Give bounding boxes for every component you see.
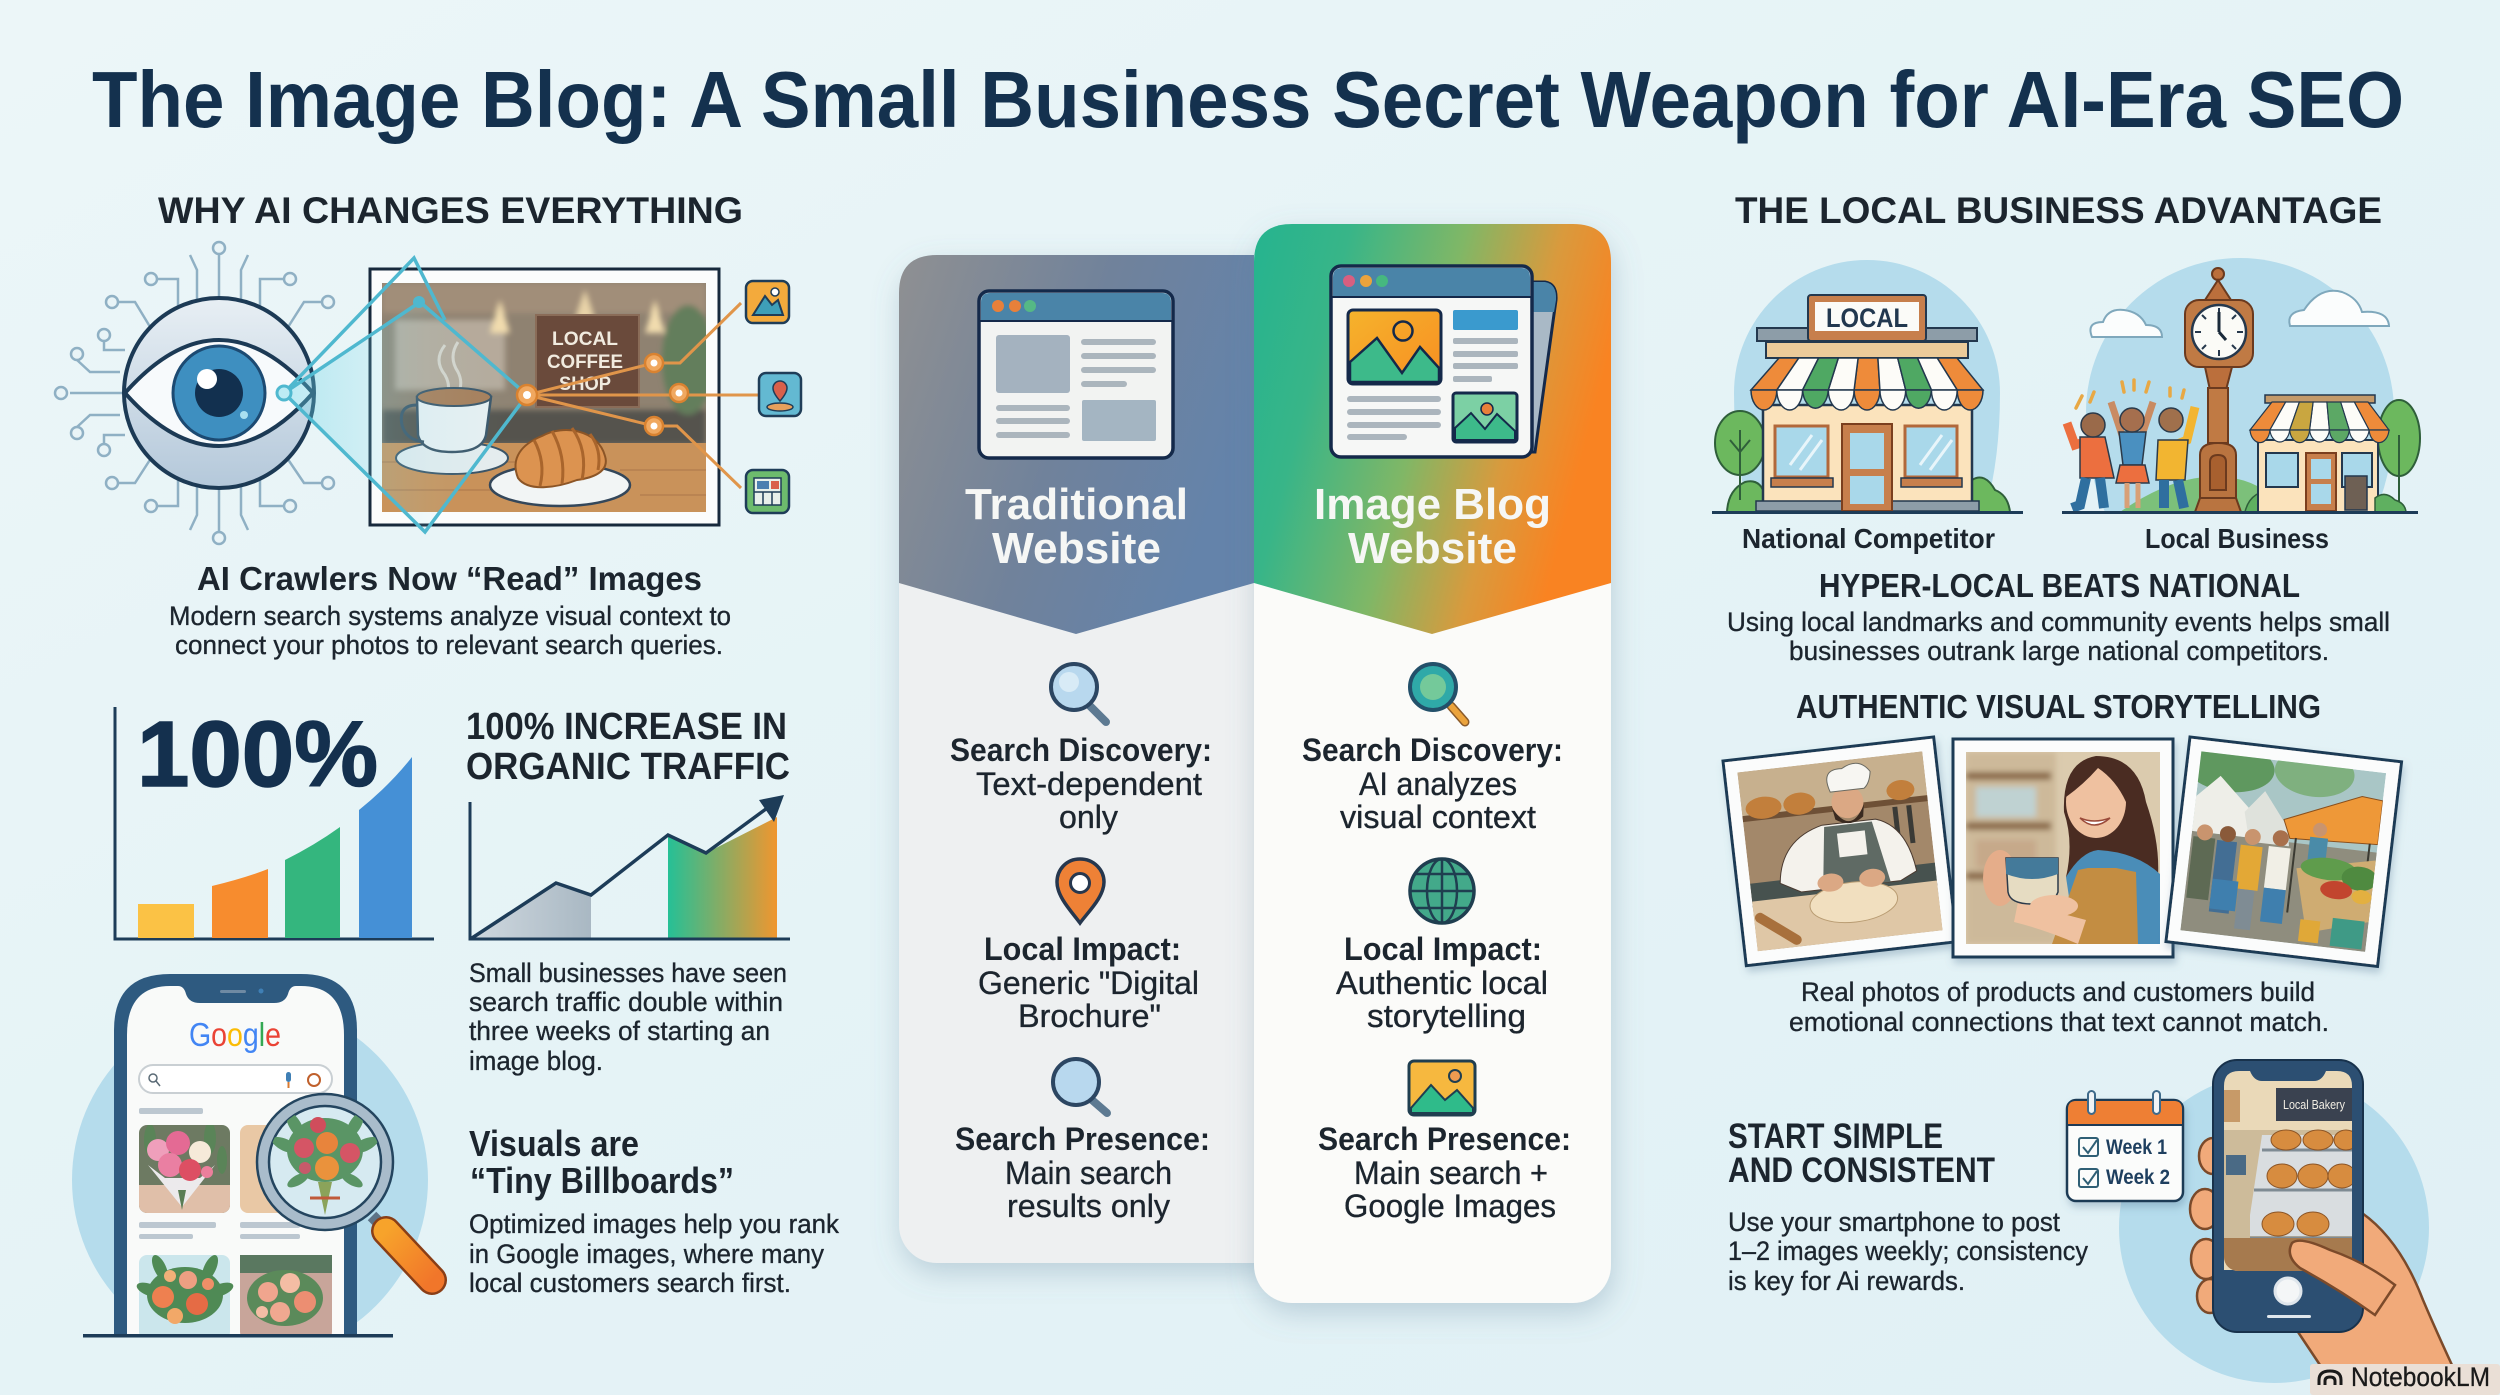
row: local impact traditional: Local Impact: bbox=[984, 931, 1181, 967]
icon: location pin bbox=[1057, 859, 1104, 923]
icon: weekly calendar checklist bbox=[2067, 1091, 2183, 1201]
awning bbox=[1751, 358, 1983, 410]
text: visuals are tiny billboards: local customers search first. bbox=[469, 1268, 791, 1298]
text: small businesses traffic double: Small businesses have seen bbox=[469, 958, 787, 988]
text: small businesses traffic double bbox=[469, 958, 787, 1076]
icon: location tag bbox=[759, 373, 801, 416]
area chart: organic traffic growth bbox=[470, 795, 790, 939]
search bar bbox=[139, 1065, 332, 1093]
row: search presence traditional bbox=[955, 1059, 1210, 1224]
cloud bbox=[2090, 310, 2162, 337]
heading: 100 percent increase in organic traffic: 100% INCREASE IN bbox=[466, 706, 787, 748]
icon: weekly calendar checklist: Week 1 bbox=[2106, 1136, 2167, 1159]
text: real photos build connections: emotional connections that text cannot match. bbox=[1789, 1007, 2329, 1037]
label: national competitor: National Competitor bbox=[1742, 523, 1995, 554]
text: start simple and consistent: Use your smartphone to post bbox=[1728, 1207, 2060, 1237]
result image: bouquet 3 bbox=[136, 1255, 234, 1334]
text: small businesses traffic double: three weeks of starting an bbox=[469, 1016, 770, 1046]
row: local impact image blog: Authentic local bbox=[1336, 965, 1548, 1001]
text: small businesses traffic double: search traffic double within bbox=[469, 987, 783, 1017]
result image: bouquet 2 partly hidden bbox=[240, 1125, 332, 1213]
text: AI crawlers now read images: connect your photos to relevant search queries. bbox=[175, 630, 723, 660]
row: local impact traditional bbox=[978, 859, 1199, 1034]
text: small businesses traffic double: image blog. bbox=[469, 1046, 603, 1076]
row: search presence traditional: Search Presence: bbox=[955, 1121, 1210, 1157]
photo: farmers market bbox=[2164, 734, 2402, 966]
row: local impact image blog: Local Impact: bbox=[1344, 931, 1542, 967]
row: search presence image blog: Search Presence: bbox=[1318, 1121, 1571, 1157]
community people cheering bbox=[2067, 402, 2195, 508]
result image: bouquet 1 bbox=[139, 1122, 230, 1213]
illustration: national competitor storefront bbox=[1712, 260, 2023, 514]
header: traditional website: Traditional bbox=[965, 480, 1188, 529]
image: local coffee shop photo: LOCAL bbox=[552, 329, 618, 350]
row: search presence traditional: results only bbox=[1007, 1188, 1170, 1224]
clock tower bbox=[2185, 268, 2253, 512]
panel: why AI changes everything bbox=[55, 190, 839, 1358]
phone: Local Bakery bbox=[2283, 1097, 2345, 1112]
header: image blog website bbox=[1254, 224, 1611, 634]
row: local impact traditional: Generic "Digital bbox=[978, 965, 1199, 1001]
heading: the local business advantage: THE LOCAL BUSINESS ADVANTAGE bbox=[1735, 190, 2382, 231]
illustration: national competitor storefront: LOCAL bbox=[1826, 303, 1908, 333]
icon: layout tag bbox=[746, 470, 789, 513]
text: start simple and consistent: 1–2 images weekly; consistency bbox=[1728, 1236, 2088, 1266]
row: search presence image blog: Google Images bbox=[1344, 1188, 1556, 1224]
icon: image bbox=[1409, 1061, 1475, 1115]
illustration: phone with Google image results bbox=[72, 974, 432, 1358]
icon: AI eye with circuit rays bbox=[55, 242, 334, 544]
heading: authentic visual storytelling: AUTHENTIC VISUAL STORYTELLING bbox=[1796, 688, 2321, 725]
icon: magnifier bbox=[1053, 1059, 1107, 1113]
icon: image tag bbox=[746, 281, 789, 323]
text: hyper-local beats national: HYPER-LOCAL BEATS NATIONAL bbox=[1819, 567, 2300, 604]
text: real photos build connections bbox=[1789, 977, 2329, 1037]
image: local coffee shop photo: COFFEE bbox=[547, 352, 623, 373]
icon: traditional browser window bbox=[979, 291, 1173, 458]
illustration: local business with clock and community bbox=[2062, 258, 2420, 514]
text: hyper-local beats national: Using local landmarks and community events helps small bbox=[1727, 607, 2390, 637]
hand and arm bbox=[2190, 1138, 2466, 1395]
Google logo: Google bbox=[189, 1016, 281, 1053]
text: visuals are tiny billboards: in Google images, where many bbox=[469, 1239, 824, 1269]
phone bbox=[2213, 1060, 2363, 1332]
scan beam from eye to photo bbox=[277, 258, 527, 532]
text: visuals are tiny billboards bbox=[469, 1123, 839, 1298]
panel: the local business advantage bbox=[1712, 190, 2466, 1395]
label: local business: Local Business bbox=[2145, 523, 2329, 554]
image: local coffee shop photo bbox=[370, 269, 719, 525]
heading: 100 percent increase in organic traffic: ORGANIC TRAFFIC bbox=[466, 746, 790, 788]
thumb bbox=[2290, 1241, 2395, 1315]
header: image blog website: Website bbox=[1348, 524, 1517, 573]
small shop bbox=[2245, 395, 2420, 512]
row: search discovery image blog: visual context bbox=[1340, 799, 1536, 835]
connector lines and nodes to tag icons bbox=[517, 303, 760, 488]
text: visuals are tiny billboards: “Tiny Billboards” bbox=[470, 1160, 734, 1201]
heading: why AI changes everything: WHY AI CHANGES EVERYTHING bbox=[158, 190, 743, 231]
row: search presence image blog: Main search + bbox=[1354, 1155, 1548, 1191]
row: search discovery traditional bbox=[950, 664, 1212, 835]
row: local impact traditional: Brochure" bbox=[1018, 998, 1161, 1034]
row: search presence traditional: Main search bbox=[1005, 1155, 1172, 1191]
icon: magnifier with green lens bbox=[1410, 664, 1465, 722]
row: search discovery traditional: Search Discovery: bbox=[950, 732, 1212, 768]
row: search discovery image blog: Search Discovery: bbox=[1302, 732, 1563, 768]
magnifier over bouquet bbox=[257, 1094, 432, 1280]
text: hyper-local beats national: businesses outrank large national competitors. bbox=[1789, 636, 2329, 666]
NotebookLM badge: NotebookLM bbox=[2351, 1362, 2490, 1392]
result image: bouquet 4 bbox=[240, 1255, 332, 1340]
header: image blog website: Image Blog bbox=[1314, 480, 1551, 529]
image: local coffee shop photo: SHOP bbox=[559, 374, 611, 395]
row: search discovery traditional: only bbox=[1059, 799, 1118, 835]
panel: image blog website comparison column bbox=[1254, 224, 1611, 1303]
icon: image blog browser window bbox=[1331, 266, 1556, 457]
text: real photos build connections: Real photos of products and customers build bbox=[1801, 977, 2315, 1007]
text: start simple and consistent: START SIMPLE bbox=[1728, 1117, 1943, 1156]
heading: 100 percent increase in organic traffic bbox=[466, 706, 790, 788]
illustration: smartphone in hand photographing bakery bbox=[2119, 1060, 2466, 1395]
row: local impact image blog bbox=[1336, 859, 1548, 1034]
panel: traditional website comparison column bbox=[899, 255, 1299, 1263]
text: start simple and consistent: is key for Ai rewards. bbox=[1728, 1266, 1965, 1296]
bar chart: 100 percent bbox=[115, 702, 434, 939]
icon: weekly calendar checklist: Week 2 bbox=[2106, 1166, 2170, 1189]
row: local impact image blog: storytelling bbox=[1367, 998, 1526, 1034]
photo: smiling customer with mug bbox=[1953, 739, 2173, 957]
row: search presence image blog bbox=[1318, 1061, 1571, 1224]
cloud bbox=[2289, 291, 2389, 326]
text: visuals are tiny billboards: Optimized images help you rank bbox=[469, 1209, 839, 1239]
text: start simple and consistent bbox=[1728, 1117, 2088, 1296]
bar chart: 100 percent: 100% bbox=[137, 702, 378, 806]
header: traditional website: Website bbox=[992, 524, 1161, 573]
icon: magnifier bbox=[1051, 664, 1106, 722]
text: AI crawlers now read images: Modern search systems analyze visual context to bbox=[169, 601, 731, 631]
text: AI crawlers now read images bbox=[169, 560, 731, 660]
row: search discovery image blog: AI analyzes bbox=[1359, 766, 1517, 802]
row: search discovery traditional: Text-dependent bbox=[976, 766, 1202, 802]
row: search discovery image blog bbox=[1302, 664, 1563, 835]
text: visuals are tiny billboards: Visuals are bbox=[469, 1123, 639, 1164]
icon: globe bbox=[1410, 859, 1474, 923]
text: start simple and consistent: AND CONSISTENT bbox=[1728, 1151, 1995, 1190]
text: AI crawlers now read images: AI Crawlers Now “Read” Images bbox=[197, 560, 702, 597]
text: hyper-local beats national bbox=[1727, 567, 2390, 666]
header: traditional website bbox=[899, 255, 1254, 634]
photo: baker kneading dough bbox=[1723, 737, 1957, 966]
